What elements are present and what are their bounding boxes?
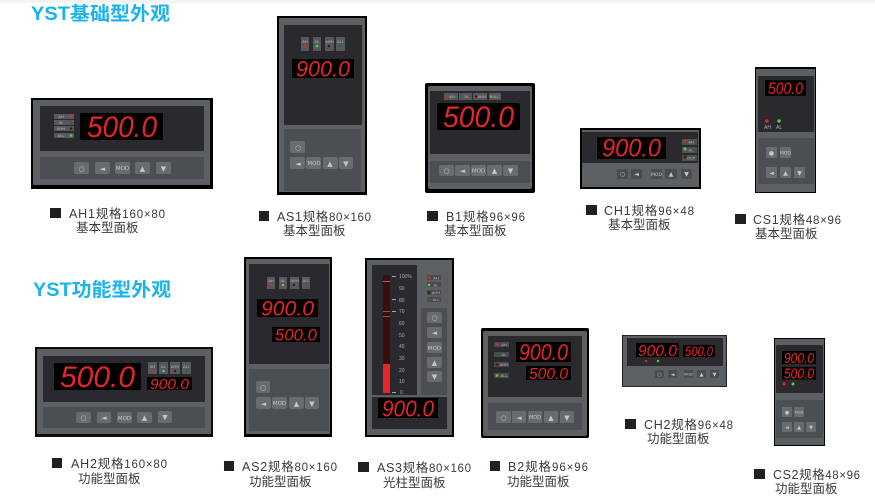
buttons: ◄ [295, 160, 301, 168]
device: CH1 [580, 128, 701, 189]
buttons [655, 370, 719, 378]
scale: 90 [399, 286, 405, 292]
buttons: MOD [780, 150, 791, 156]
label: B2 [490, 459, 588, 489]
buttons: MOD [118, 416, 131, 422]
device: CH1: AH [688, 140, 694, 144]
label: AS2: AS2规格80×160 [242, 459, 337, 474]
buttons: MOD [795, 410, 804, 414]
buttons: MOD [684, 372, 693, 376]
label: AH1 [50, 206, 165, 235]
device: B1: AL [465, 94, 470, 99]
device: CS2 [774, 338, 825, 446]
label: CS2: CS2规格48×96 [773, 467, 860, 482]
buttons: ◄ [671, 372, 675, 378]
buttons [74, 162, 171, 174]
device: AH1: AHH [57, 126, 65, 131]
scale: 60 [399, 321, 405, 327]
scale: 100% [399, 274, 412, 280]
display: 900.0: 900.0 [602, 134, 661, 162]
buttons [76, 411, 172, 423]
device: AH1: ALL [57, 133, 65, 138]
device: AH1: AH [58, 114, 64, 119]
label: CS1 [735, 212, 841, 241]
device: B1: ALL [492, 94, 500, 99]
label: AS2 [224, 459, 337, 489]
buttons [782, 407, 816, 432]
label: CH2: CH2规格96×48 [644, 417, 733, 432]
label: B1 [427, 209, 525, 238]
buttons: ◄ [432, 329, 438, 337]
buttons [617, 169, 692, 179]
device: CH1: OUT [687, 156, 696, 160]
buttons: MOD [651, 172, 662, 178]
display: 500.0: 500.0 [529, 366, 568, 383]
buttons: ▲ [327, 160, 333, 168]
buttons: ○ [295, 144, 301, 152]
scale: 80 [399, 298, 405, 304]
buttons: ◄ [460, 167, 466, 175]
label: B2: 功能型面板 [507, 475, 570, 489]
label: CH1 [586, 203, 694, 232]
device: AH2: AH [150, 364, 155, 369]
buttons: ▲ [797, 425, 801, 431]
device: CS1: AH [764, 125, 771, 131]
label: AH1: 基本型面板 [76, 221, 139, 235]
display: 900.0: 900.0 [638, 343, 677, 360]
buttons: ▲ [140, 165, 146, 173]
buttons: ▼ [162, 414, 168, 422]
display: 500.0: 500.0 [60, 361, 135, 394]
buttons: ◄ [261, 400, 267, 408]
buttons: ▼ [432, 373, 438, 381]
buttons [496, 411, 574, 423]
title: basic series: YST基础型外观 [31, 3, 170, 25]
device: AS2: ALL [302, 278, 310, 283]
device: CH2 [622, 335, 727, 387]
device: AH1: AL [59, 120, 64, 125]
buttons [439, 165, 518, 176]
device: B1: AHH [478, 94, 486, 99]
alarm lights: AH [433, 276, 439, 280]
device: B2 [481, 328, 589, 438]
label: AS3 [358, 460, 471, 490]
label: B2: B2规格96×96 [508, 459, 588, 474]
buttons: ○ [620, 171, 625, 178]
device: AS2: AHH [290, 278, 299, 283]
buttons: MOD [529, 415, 541, 421]
display: 500.0: 500.0 [685, 343, 713, 359]
buttons: ● [785, 410, 790, 416]
scale: 50 [399, 333, 405, 339]
device: B2: ALL [500, 373, 508, 378]
buttons [766, 147, 805, 178]
alarm lights: AL [434, 282, 439, 288]
buttons: ▼ [564, 414, 570, 422]
buttons [290, 141, 353, 169]
device: B1: AH [449, 94, 455, 99]
buttons: ▲ [548, 414, 554, 422]
buttons: ○ [431, 314, 438, 322]
buttons: ○ [657, 372, 662, 378]
buttons: ▼ [809, 425, 813, 431]
buttons: ○ [500, 414, 507, 422]
label: AH2: AH2规格160×80 [71, 456, 167, 471]
label: B1: B1规格96×96 [446, 209, 525, 224]
device: AS1: AL [315, 39, 320, 44]
label: CS2: 功能型面板 [775, 482, 838, 496]
buttons: ▲ [669, 171, 674, 178]
light bar [383, 275, 390, 393]
scale: 0 [400, 390, 403, 396]
buttons: ◄ [785, 425, 789, 431]
buttons: ◄ [634, 171, 639, 178]
display: 900.0: 900.0 [382, 396, 434, 422]
label: AS1: 基本型面板 [283, 224, 346, 238]
label: CS1: 基本型面板 [755, 227, 818, 241]
device: AS1 [277, 16, 367, 195]
buttons: MOD [428, 346, 441, 352]
scale: 70 [399, 309, 405, 315]
display: 500.0: 500.0 [87, 111, 157, 144]
buttons: ▼ [161, 165, 167, 173]
label: CH1: 基本型面板 [608, 218, 671, 232]
device: B2: AH [501, 342, 507, 347]
device: B2: AHH [500, 362, 508, 367]
scale [392, 274, 412, 396]
label: AH1: AH1规格160×80 [69, 206, 165, 221]
device: AS3 bargraph [365, 258, 454, 437]
buttons: ○ [78, 165, 85, 173]
buttons: ▲ [294, 400, 300, 408]
device: AH2: AHH [171, 364, 179, 369]
display: 900.0: 900.0 [519, 339, 568, 365]
buttons: ○ [443, 167, 450, 175]
device: CH1: AL [689, 148, 694, 152]
buttons: MOD [307, 161, 321, 167]
buttons: ◄ [516, 414, 522, 422]
device: CS1: AL [776, 125, 782, 131]
scale: 20 [399, 368, 405, 374]
buttons: ◄ [101, 414, 107, 422]
buttons [256, 381, 319, 409]
alarm lights: AHH [432, 290, 440, 295]
scale: 30 [399, 356, 405, 362]
buttons: ○ [80, 414, 87, 422]
label: AH2: 功能型面板 [78, 472, 141, 486]
device: CS1 [755, 67, 816, 193]
buttons: ▲ [432, 359, 438, 367]
buttons: ▲ [783, 170, 788, 177]
buttons: ◄ [769, 170, 774, 177]
device: AS1: ALL [337, 39, 345, 44]
device: AH2: AL [161, 364, 167, 369]
label: AS1 [259, 209, 371, 238]
buttons: ● [769, 150, 774, 157]
display: 900.0: 900.0 [784, 350, 815, 367]
display: 500.0: 500.0 [443, 101, 514, 134]
device: AS1: AHH [325, 39, 334, 44]
buttons: ○ [260, 384, 266, 392]
alarm lights [427, 275, 441, 302]
device: AH2: ALL [183, 364, 191, 369]
label: AH2 [52, 456, 167, 486]
label: CH1: CH1规格96×48 [604, 203, 694, 218]
scale: 10 [399, 379, 405, 385]
label: CH2 [625, 417, 733, 446]
buttons: ◄ [100, 165, 106, 173]
label: CH2: 功能型面板 [647, 432, 710, 446]
display: 500.0: 500.0 [768, 79, 803, 98]
buttons: ▼ [684, 171, 689, 178]
display: 500.0: 500.0 [275, 326, 318, 344]
buttons: MOD [472, 168, 485, 174]
device: B1 [425, 83, 535, 193]
display: 900.0: 900.0 [296, 56, 351, 82]
buttons: MOD [273, 401, 286, 407]
buttons: ▼ [508, 167, 514, 175]
buttons: ▼ [343, 160, 349, 168]
device: B2: AL [502, 352, 507, 357]
label: AS3: AS3规格80×160 [377, 460, 471, 475]
title: functional series: YST功能型外观 [33, 279, 171, 301]
label: AS3: 光柱型面板 [383, 475, 446, 490]
device: AH2 [35, 347, 213, 437]
buttons: ▲ [142, 414, 148, 422]
display: 900.0: 900.0 [150, 376, 190, 393]
label: AS2: 功能型面板 [249, 475, 312, 489]
alarm lights: ALL [432, 297, 440, 302]
display: 900.0: 900.0 [261, 298, 314, 320]
device: AH1 [31, 98, 213, 189]
buttons: MOD [116, 166, 129, 172]
device: AS1: AH [302, 39, 308, 44]
label: AS1: AS1规格80×160 [277, 209, 371, 224]
label: CS2 [754, 467, 860, 496]
device: AS2: AH [268, 278, 274, 283]
buttons: ▼ [797, 170, 802, 177]
device: AS2: AL [281, 278, 286, 283]
buttons [427, 312, 442, 382]
buttons: ▼ [713, 372, 717, 378]
scale: 40 [399, 344, 405, 350]
buttons: ▲ [492, 167, 498, 175]
device: AS2 [244, 257, 332, 437]
buttons: ▲ [700, 372, 704, 378]
label: B1: 基本型面板 [444, 224, 507, 238]
label: CS1: CS1规格48×96 [753, 212, 841, 227]
buttons: ▼ [309, 400, 315, 408]
display: 500.0: 500.0 [784, 366, 815, 382]
